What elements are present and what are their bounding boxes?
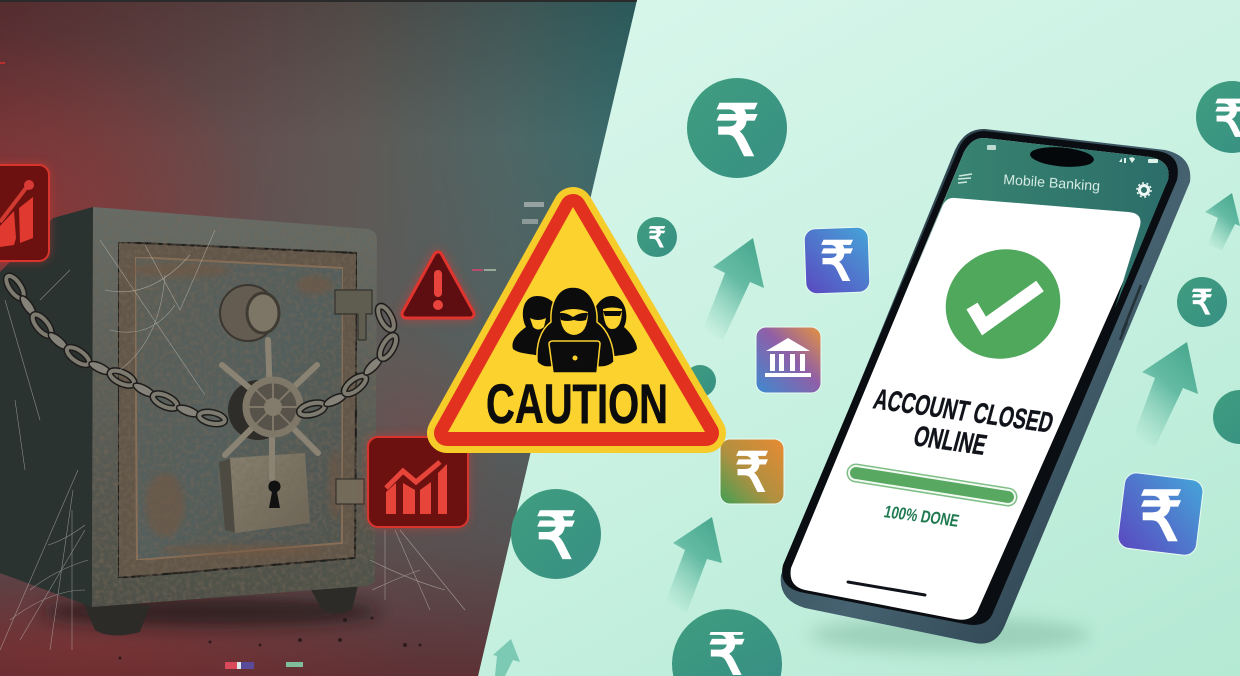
floor shadow — [40, 598, 380, 626]
safe side — [0, 207, 93, 607]
red icon: growth chart box — [368, 437, 468, 527]
safe front — [92, 207, 377, 607]
progress label: 100% DONE — [882, 501, 961, 531]
account closed heading — [870, 383, 1057, 462]
centre hacker — [537, 287, 614, 367]
laptop — [549, 341, 600, 373]
settings gear — [1137, 183, 1151, 197]
app icon: bank — [756, 327, 821, 393]
caution label: CAUTION — [486, 372, 668, 435]
right hacker — [590, 296, 637, 358]
red icon: warning triangle — [406, 256, 470, 314]
rupee coins: ₹ — [715, 92, 759, 170]
background: dark left side — [0, 0, 640, 676]
app header — [910, 138, 1169, 308]
rusty locked safe — [0, 207, 465, 650]
cobwebs — [0, 230, 465, 650]
combination dial — [220, 285, 279, 341]
account closed heading: ONLINE — [910, 420, 990, 462]
sign outer border — [447, 207, 706, 433]
floating arrows — [493, 193, 1240, 676]
red icon: chart box left — [0, 165, 49, 261]
progress bar — [856, 473, 1008, 497]
home indicator — [848, 582, 925, 595]
phone bezel — [782, 131, 1178, 625]
sign red band — [447, 207, 706, 433]
screen glass — [791, 138, 1169, 620]
caution sign — [447, 207, 706, 435]
chain — [3, 273, 399, 426]
app icon: large blue rupee: ₹ — [1139, 479, 1183, 555]
menu icon — [958, 174, 972, 183]
rupee coins: ₹ — [536, 500, 576, 572]
app title: Mobile Banking — [1003, 171, 1101, 194]
app icon: orange green rupee — [720, 439, 784, 504]
app icon: blue rupee — [804, 227, 870, 294]
app icon: blue rupee: ₹ — [820, 232, 854, 292]
success check badge — [928, 231, 1078, 377]
rupee coins: ₹ — [1191, 284, 1213, 322]
camera notch — [1029, 145, 1095, 169]
left hacker — [513, 296, 565, 358]
safe feet — [82, 585, 358, 636]
app icon: large blue rupee — [1117, 472, 1204, 557]
glitch marks — [0, 62, 544, 669]
phone body — [781, 129, 1190, 644]
status icons — [987, 145, 1158, 163]
phone shadow — [810, 617, 1090, 653]
rust patches — [130, 263, 341, 556]
side buttons — [1120, 285, 1141, 340]
rupee coins — [511, 78, 1240, 676]
hackers icon — [513, 287, 637, 373]
account closed heading: ACCOUNT CLOSED — [870, 383, 1057, 440]
smartphone — [781, 129, 1190, 644]
sign yellow centre — [448, 207, 705, 432]
hinges — [335, 290, 372, 340]
handle wheel — [222, 340, 318, 478]
rupee coins: ₹ — [648, 222, 666, 253]
safe door — [118, 242, 357, 578]
floor dirt — [118, 616, 422, 660]
app icon: orange green rupee: ₹ — [735, 443, 769, 503]
padlock — [219, 453, 310, 533]
